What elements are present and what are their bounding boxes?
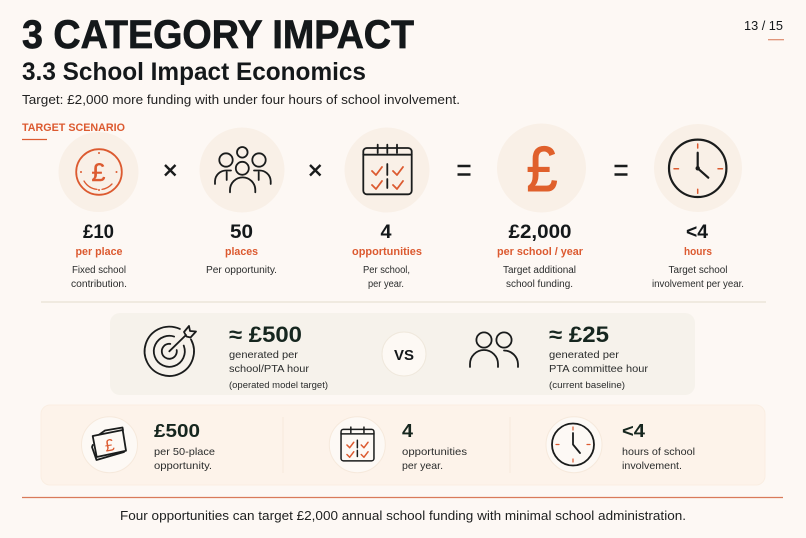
operator: multiply [310,165,320,176]
equation item: under 4 hours [652,124,744,290]
metric: £500 per opportunity: £500 [154,421,200,441]
metric: 4 opportunities per year: 4 [402,421,413,441]
metric: £500 per hour: generated per [229,349,299,361]
operator: equals [458,166,470,174]
metric: under 4 hours [622,421,695,472]
metric: £500 per hour: (operated model target) [229,380,328,390]
icon: pound coin [58,132,138,212]
badge: versus [382,332,426,376]
equation item: £2,000 per school per year: £2,000 [508,222,572,243]
equation item: 4 opportunities: Per school, [363,265,410,276]
equation item: 50 places [200,128,284,276]
metric: under 4 hours: involvement. [622,460,682,472]
equation item: 4 opportunities [344,128,430,290]
metric: under 4 hours: <4 [622,421,645,441]
metric: £25 per hour: (current baseline) [549,380,625,390]
subtitle: 3.3 School Impact Economics [22,58,366,86]
section label: target scenario: TARGET SCENARIO [22,122,125,134]
icon: small calendar [329,417,385,473]
equation item: 50 places: places [225,246,258,258]
metric: £500 per hour: school/PTA hour [229,363,310,375]
icon: clock [654,124,742,212]
target statement: Target: £2,000 more funding with under four hours of school involvement. [22,92,460,107]
equation item: £10 per place: £10 [83,222,114,243]
operator: equals [614,166,628,174]
metric: 4 opportunities per year: per year. [402,460,443,472]
equation item: 50 places: 50 [230,222,253,243]
metric: 4 opportunities per year: opportunities [402,446,467,458]
equation item: £2,000 per school per year [497,124,586,290]
panel: comparison [110,313,695,395]
metric: 4 opportunities per year [402,421,467,472]
icon: large pound sign: £ [526,133,558,205]
metric: £500 per opportunity [154,421,215,472]
equation item: £10 per place: per place [76,246,122,258]
operator: multiply [165,165,176,176]
panel: summary metrics [41,405,765,485]
metric: £25 per hour: PTA committee hour [549,363,649,375]
title: 3 CATEGORY IMPACT [22,13,414,57]
icon: group of people [200,128,284,212]
metric: £500 per hour [229,322,328,390]
icon: calendar with checks [344,128,430,212]
metric: £25 per hour: generated per [549,349,620,361]
equation item: under 4 hours: hours [684,246,712,258]
equation item: under 4 hours: involvement per year. [652,279,744,290]
equation item: 4 opportunities: per year. [368,279,404,290]
metric: £25 per hour: ≈ £25 [549,322,609,347]
equation item: £2,000 per school per year: Target additional [503,265,576,276]
badge: versus: VS [394,348,414,364]
equation item: £10 per place [58,132,138,290]
icon: banknotes [82,417,138,473]
metric: £500 per opportunity: opportunity. [154,460,212,472]
page number: 13 / 15 [744,18,783,33]
icon: small clock [546,417,602,473]
equation item: £10 per place: contribution. [71,279,127,290]
equation item: £2,000 per school per year: school funding. [506,279,573,290]
icon: target with arrow [136,318,203,385]
icon: large pound sign [497,124,586,212]
section label: target scenario [22,122,125,140]
icon: banknotes: £ [103,435,116,456]
icon: two people [470,332,518,367]
page number [744,18,784,40]
icon: pound coin: £ [92,159,106,187]
footer statement: Four opportunities can target £2,000 annual school funding with minimal school administration. [120,508,686,523]
equation item: 4 opportunities: 4 [380,222,392,243]
equation item: 50 places: Per opportunity. [206,265,277,276]
metric: £500 per opportunity: per 50-place [154,446,215,458]
equation item: under 4 hours: Target school [668,265,728,276]
metric: £500 per hour: ≈ £500 [229,322,302,347]
metric: £25 per hour [549,322,649,390]
equation item: under 4 hours: <4 [686,222,708,243]
equation item: 4 opportunities: opportunities [352,246,422,258]
equation item: £2,000 per school per year: per school / year [497,246,584,258]
equation item: £10 per place: Fixed school [72,265,126,276]
metric: under 4 hours: hours of school [622,446,695,458]
